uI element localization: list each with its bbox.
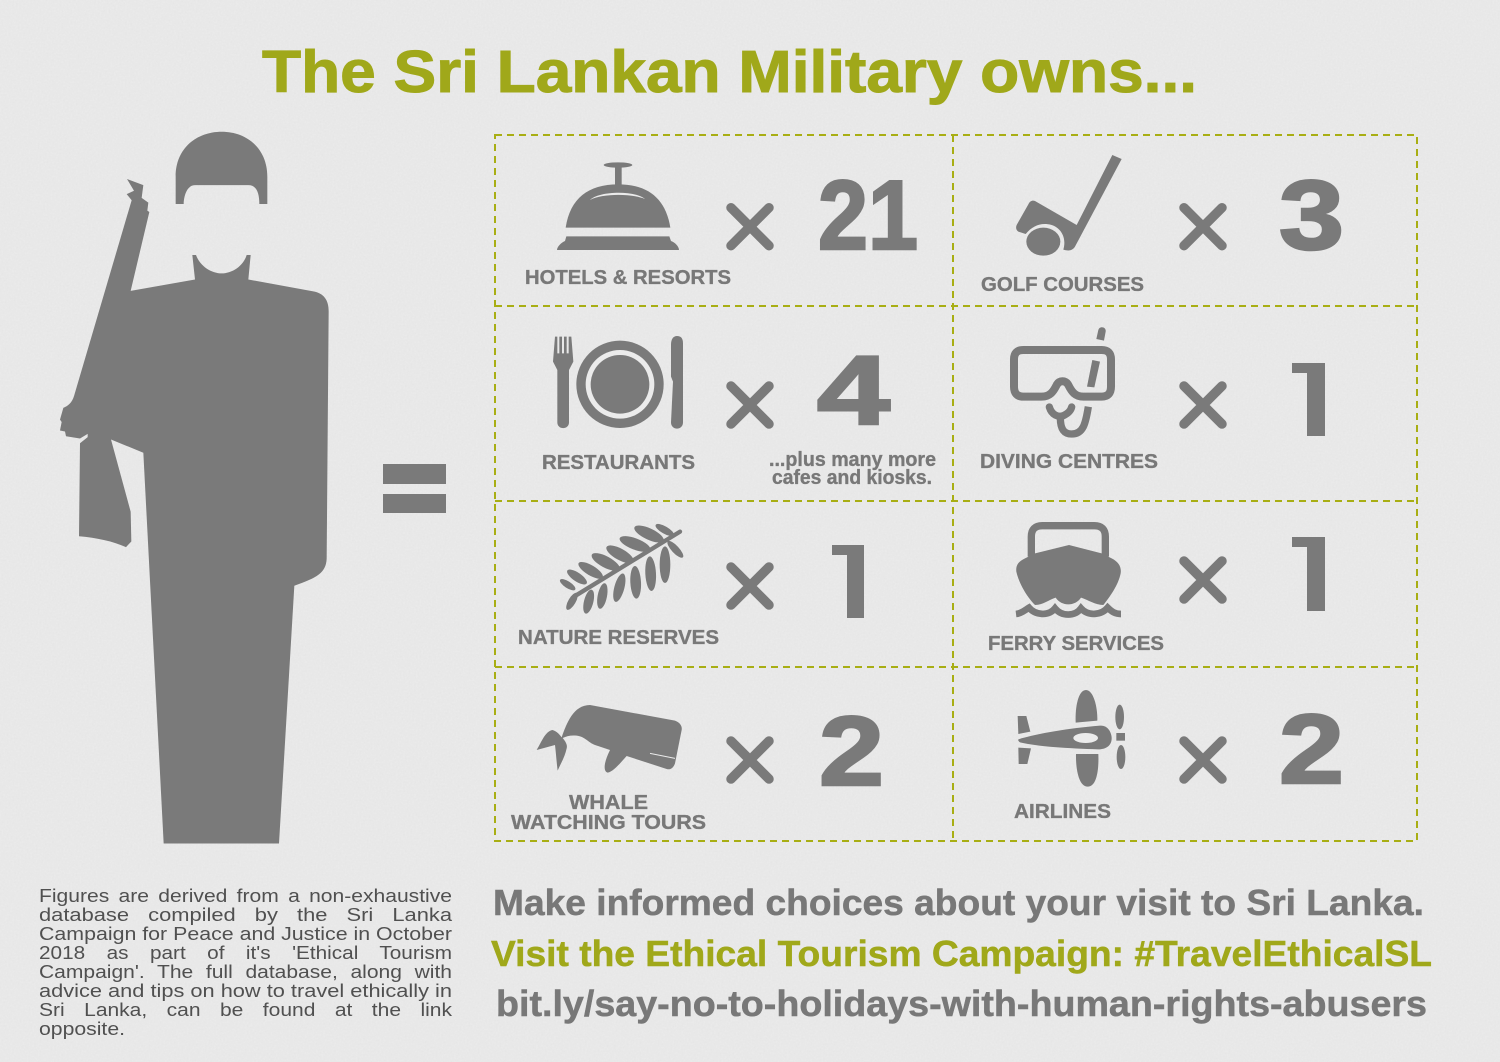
note: cafes and kiosks: cafes and kiosks. — [772, 467, 932, 489]
dashed grid — [495, 135, 1417, 841]
multiply sign — [1184, 208, 1222, 246]
source note: database compiled by the Sri Lanka — [39, 904, 453, 925]
soldier silhouette — [60, 132, 329, 843]
panel: whale watching tours — [511, 696, 884, 834]
call to action: informed choices: Make informed choices about your visit to Sri Lanka. — [493, 882, 1424, 923]
label: WHALE — [569, 792, 648, 814]
count — [832, 545, 864, 618]
note: cafes and kiosks — [769, 449, 936, 489]
count: 2 — [1279, 694, 1344, 804]
count: 1 — [1280, 347, 1340, 457]
count: 21 — [818, 160, 918, 270]
call to action: campaign: Visit the Ethical Tourism Campaign: #TravelEthicalSL — [491, 933, 1432, 974]
label: NATURE RESERVES — [518, 627, 719, 649]
panel: airlines — [1014, 690, 1344, 823]
multiply sign — [1184, 561, 1222, 599]
label: HOTELS & RESORTS — [525, 267, 731, 289]
multiply sign — [731, 567, 769, 605]
icon: golf club and ball — [1016, 155, 1122, 256]
source note: Campaign for Peace and Justice in October — [39, 923, 452, 944]
icon: service bell — [557, 162, 679, 250]
panel: diving centres — [980, 327, 1340, 473]
multiply sign — [1184, 386, 1222, 424]
title: The Sri Lankan Military owns... — [262, 39, 1197, 105]
count: 1 — [819, 529, 879, 639]
panel: restaurants — [542, 335, 936, 489]
multiply sign — [731, 741, 769, 779]
count — [1292, 363, 1325, 436]
count: 4 — [817, 335, 890, 445]
count: 2 — [819, 696, 884, 806]
label: RESTAURANTS — [542, 452, 695, 474]
source note: Figures are derived from a non-exhaustive — [39, 885, 452, 906]
link: bit.ly/say-no-to-holidays-with-human-rights-abusers — [496, 983, 1427, 1024]
multiply sign — [1184, 741, 1222, 779]
source note: 2018 as part of it's 'Ethical Tourism — [39, 942, 452, 963]
panel: hotels and resorts — [525, 160, 918, 289]
label: FERRY SERVICES — [988, 633, 1164, 655]
panel: nature reserves — [518, 522, 879, 649]
icon: fern — [558, 522, 686, 615]
label: DIVING CENTRES — [980, 451, 1158, 473]
icon: diving mask and snorkel — [1014, 327, 1111, 434]
source note: opposite. — [39, 1018, 125, 1039]
source note: advice and tips on how to travel ethically in — [39, 980, 452, 1001]
count: 1 — [1280, 522, 1340, 632]
source note: Sri Lanka, can be found at the link — [39, 999, 453, 1020]
count: 3 — [1279, 160, 1344, 270]
count — [1292, 537, 1325, 611]
icon: whale — [537, 705, 682, 773]
icon: plate and cutlery — [553, 336, 683, 429]
icon: ferry boat — [1016, 526, 1121, 615]
panel: ferry services — [988, 522, 1340, 655]
note: cafes and kiosks: ...plus many more — [769, 449, 936, 471]
label — [511, 792, 706, 834]
source note: Campaign'. The full database, along with — [39, 961, 452, 982]
equals sign — [383, 464, 446, 513]
source note — [39, 885, 453, 1039]
label: WATCHING TOURS — [511, 812, 706, 834]
panel: golf courses — [981, 155, 1344, 296]
multiply sign — [731, 386, 769, 424]
label: GOLF COURSES — [981, 274, 1144, 296]
icon: propeller plane — [1018, 690, 1125, 787]
multiply sign — [731, 208, 769, 246]
label: AIRLINES — [1014, 801, 1111, 823]
